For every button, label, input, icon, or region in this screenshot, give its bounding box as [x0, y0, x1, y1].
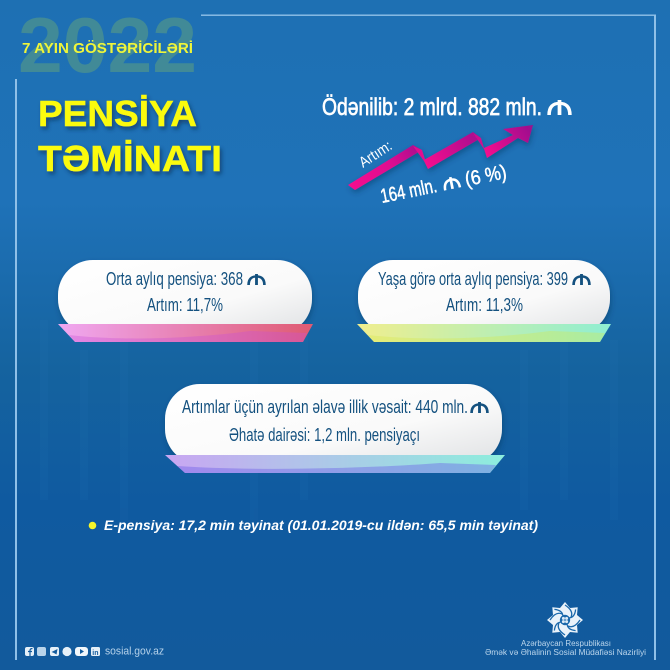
card text: Artımlar üçün ayrılan əlavə illik vəsait: 440 mln.	[182, 397, 468, 417]
card body	[58, 260, 312, 334]
ribbon	[357, 324, 611, 342]
ministry name: Azərbaycan Respublikası	[521, 639, 611, 648]
ministry emblem	[547, 602, 583, 638]
social icons: in	[92, 650, 99, 657]
card text	[182, 397, 487, 445]
card: average monthly pension	[58, 260, 313, 342]
total paid heading: Ödənilib: 2 mlrd. 882 mln.	[322, 94, 542, 121]
growth label: Artım:	[356, 137, 395, 171]
bullet	[89, 522, 96, 529]
faint background chart bars	[40, 280, 618, 520]
growth value: 164 mln.	[379, 175, 439, 208]
card text	[378, 269, 589, 315]
card text: Əhatə dairəsi: 1,2 mln. pensiyaçı	[229, 425, 420, 445]
growth arrow	[348, 125, 533, 190]
e-pension note: E-pensiya: 17,2 min təyinat (01.01.2019-cu ildən: 65,5 min təyinat)	[104, 517, 538, 533]
ribbon	[58, 324, 313, 342]
growth value	[379, 161, 508, 208]
title: TƏMİNATI	[38, 138, 222, 179]
watermark year: 2022	[18, 1, 197, 89]
title	[38, 93, 222, 179]
card: additional annual funds	[165, 384, 505, 473]
ribbon	[165, 455, 505, 473]
card text: Artım: 11,3%	[446, 295, 523, 315]
social icons	[25, 647, 100, 657]
card body	[358, 260, 610, 334]
title: PENSİYA	[38, 93, 197, 134]
growth value: (6 %)	[463, 161, 508, 191]
card: old-age average monthly pension	[357, 260, 611, 342]
ministry name	[485, 639, 646, 657]
card body	[165, 384, 502, 464]
ministry name: Əmək və Əhalinin Sosial Müdafiəsi Nazirliyi	[485, 648, 646, 657]
card text: Yaşa görə orta aylıq pensiya: 399	[378, 269, 568, 289]
card text: Orta aylıq pensiya: 368	[106, 269, 243, 289]
period label: 7 AYIN GÖSTƏRİCİLƏRİ	[22, 40, 193, 57]
card text: Artım: 11,7%	[147, 295, 223, 315]
website: sosial.gov.az	[105, 646, 164, 658]
card text	[106, 269, 264, 315]
